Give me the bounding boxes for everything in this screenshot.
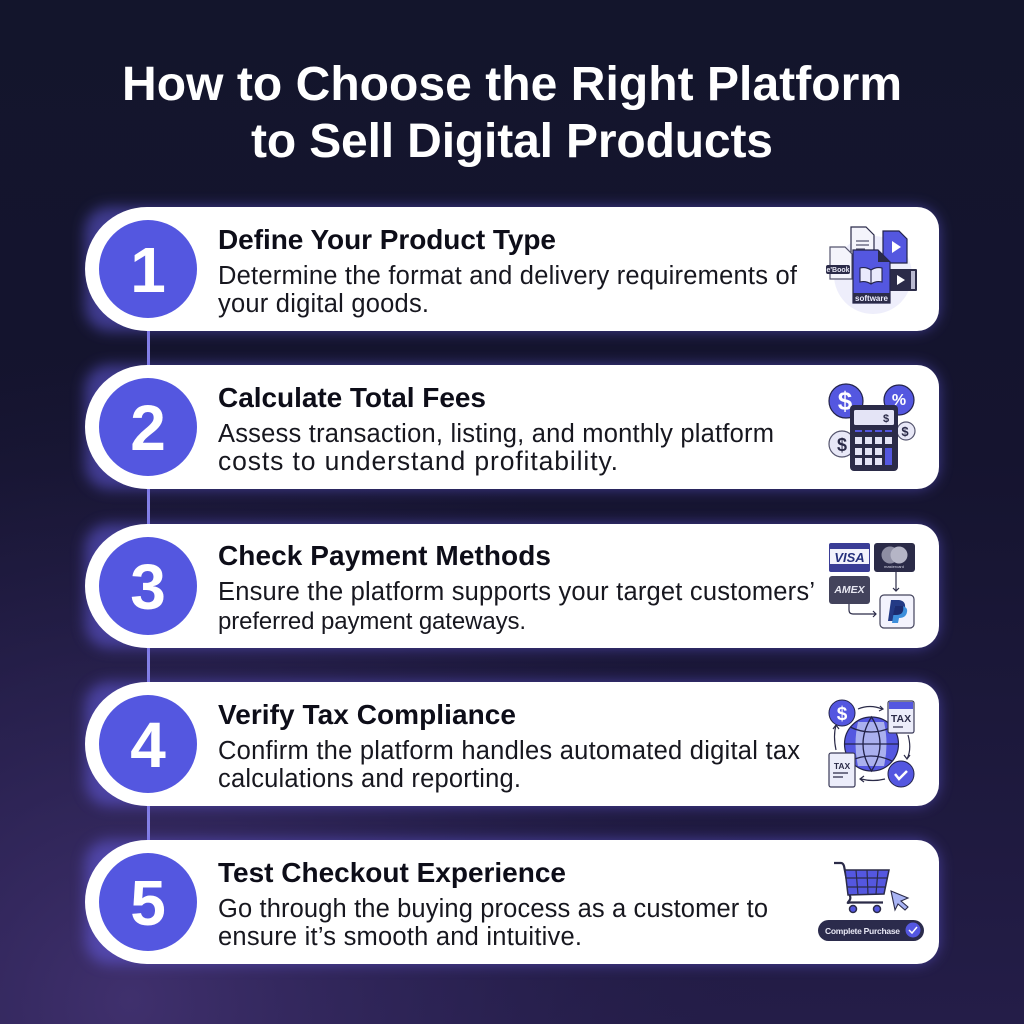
number badge 4: 4	[130, 709, 166, 781]
title: to Sell Digital Products	[251, 115, 773, 168]
heading 2: Calculate Total Fees	[218, 382, 486, 413]
icon: calculator with coins: %	[892, 392, 906, 409]
description 5	[218, 895, 768, 951]
description 1: Determine the format and delivery requirements of	[218, 262, 798, 290]
number badge 3	[99, 537, 197, 635]
description 4: Confirm the platform handles automated digital tax	[218, 737, 800, 765]
title: How to Choose the Right Platform	[122, 58, 902, 111]
description 4: calculations and reporting.	[218, 765, 521, 793]
number badge 1: 1	[130, 234, 166, 306]
icon: calculator with coins: $	[837, 435, 847, 455]
number badge 2	[99, 378, 197, 476]
number badge 3: 3	[130, 551, 166, 623]
number badge 1	[99, 220, 197, 318]
description 5: ensure it’s smooth and intuitive.	[218, 923, 582, 951]
heading 1: Define Your Product Type	[218, 224, 556, 255]
description 3	[218, 578, 815, 635]
icon: payment cards: AMEX	[833, 584, 866, 596]
icon: tax globe: $	[837, 704, 848, 725]
number badge 5: 5	[130, 867, 166, 939]
icon: payment cards	[829, 543, 915, 628]
number badge 4	[99, 695, 197, 793]
description 2: Assess transaction, listing, and monthly platform	[218, 420, 774, 448]
heading 5: Test Checkout Experience	[218, 857, 566, 888]
description 2	[218, 420, 774, 476]
icon: calculator with coins: $	[883, 413, 889, 425]
description 4	[218, 737, 800, 793]
description 3: preferred payment gateways.	[218, 608, 526, 635]
description 1	[218, 262, 798, 318]
icon: digital files: software	[855, 294, 888, 303]
heading 3: Check Payment Methods	[218, 540, 551, 571]
panel: step 1	[85, 207, 939, 331]
number badge 2: 2	[130, 392, 166, 464]
description 5: Go through the buying process as a customer to	[218, 895, 768, 923]
panel: step 5	[85, 840, 939, 964]
icon: calculator with coins: $	[901, 424, 909, 439]
icon: digital files: e'Book	[826, 267, 850, 274]
icon: tax globe: TAX	[891, 713, 911, 725]
icon: calculator with coins: $	[838, 386, 853, 416]
description 2: costs to understand profitability.	[218, 446, 618, 476]
icon: shopping cart and button	[818, 863, 924, 941]
icon: calculator with coins	[829, 384, 915, 471]
icon: tax globe	[829, 700, 914, 787]
connector line between steps	[147, 320, 150, 860]
panel: step 3	[85, 524, 939, 648]
title	[122, 58, 902, 168]
icon: tax globe: TAX	[834, 761, 851, 771]
icon: digital files	[826, 227, 917, 314]
heading 4: Verify Tax Compliance	[218, 699, 516, 730]
description 3: Ensure the platform supports your target customers’	[218, 578, 815, 606]
icon: payment cards: VISA	[834, 550, 865, 565]
icon: payment cards: mastercard	[884, 564, 904, 569]
description 1: your digital goods.	[218, 290, 429, 318]
panel: step 4	[85, 682, 939, 806]
number badge 5	[99, 853, 197, 951]
icon: shopping cart and button: Complete Purchase	[825, 926, 900, 936]
panel: step 2	[85, 365, 939, 489]
